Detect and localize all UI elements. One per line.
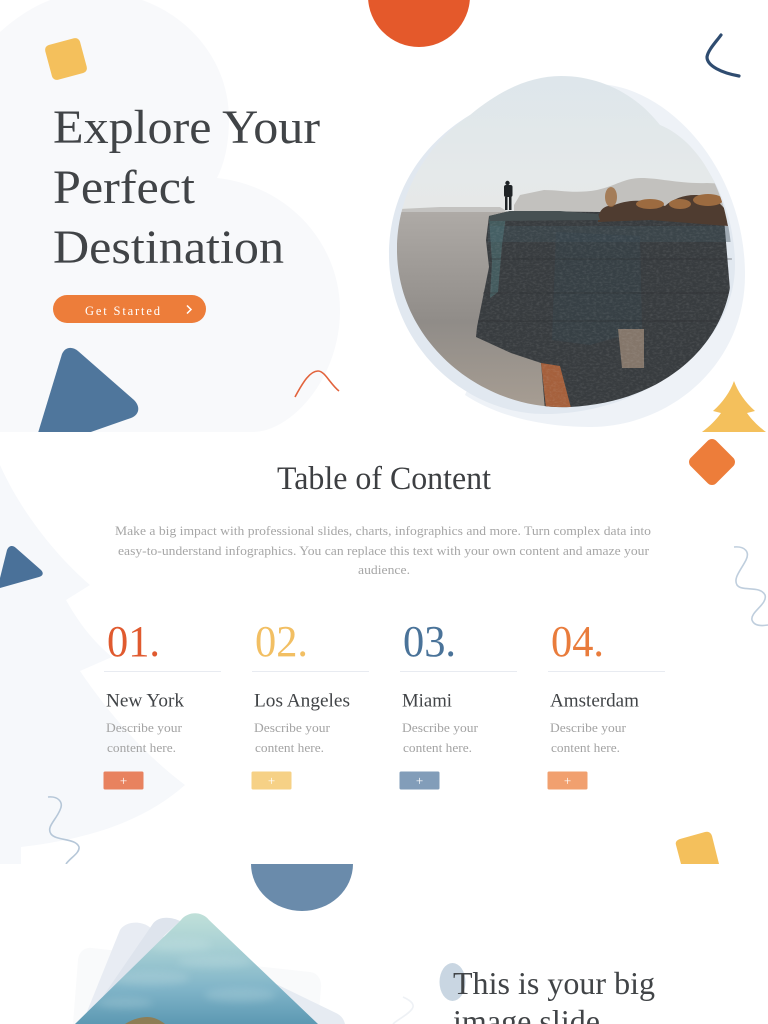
column: Los Angeles: Los Angeles <box>254 690 350 712</box>
panel: hero <box>38 0 766 432</box>
icon: yellow rounded square <box>44 37 88 81</box>
background blob <box>0 0 340 432</box>
photo: clouds above peak <box>75 913 318 1024</box>
column: New York <box>104 617 221 790</box>
icon: blue triangle <box>38 348 138 433</box>
column: Amsterdam <box>548 617 665 790</box>
icon: blue ellipse <box>440 963 466 1001</box>
slide heading: This is your big <box>453 965 655 1001</box>
column: Los Angeles: + <box>268 773 275 788</box>
icon: faint chevron <box>393 997 413 1024</box>
person silhouette <box>504 181 512 210</box>
back shape: tilted triangle left <box>82 923 175 1024</box>
icon: orange circle <box>368 0 470 47</box>
icon: orange diamond <box>687 437 737 487</box>
back blob: pale <box>465 84 745 427</box>
column: Amsterdam: + <box>564 773 571 788</box>
hero title: Perfect <box>53 161 196 214</box>
icon: left squiggle <box>48 797 79 864</box>
button: get started <box>53 295 206 323</box>
column: Los Angeles: Describe your <box>254 720 331 735</box>
back blob: blue <box>389 85 735 414</box>
column: New York: + <box>120 773 127 788</box>
column: Miami: + <box>416 773 423 788</box>
background tree <box>0 465 185 864</box>
intro paragraph: audience. <box>358 562 410 577</box>
column: Miami <box>400 617 517 790</box>
column: Miami: Describe your <box>402 720 479 735</box>
back shape: pale rounded square <box>73 948 321 1024</box>
photo: cliff <box>397 76 732 408</box>
hero title: Explore Your <box>53 101 320 154</box>
column: Los Angeles: content here. <box>255 740 324 755</box>
column: New York: content here. <box>107 740 176 755</box>
column: Miami: Miami <box>402 690 452 712</box>
icon: blue half circle <box>251 864 353 911</box>
hero title <box>53 101 320 274</box>
column: Amsterdam: content here. <box>551 740 620 755</box>
icon: right squiggle <box>734 547 768 625</box>
slide heading <box>453 965 655 1024</box>
hero title: Destination <box>53 221 284 274</box>
column: Amsterdam: Describe your <box>550 720 627 735</box>
column: Amsterdam: Amsterdam <box>550 690 639 712</box>
column: Amsterdam: 04. <box>551 617 604 666</box>
icon: yellow tree <box>702 381 766 432</box>
panel: table of content <box>0 439 768 864</box>
intro paragraph: Make a big impact with professional slides, charts, infographics and more. Turn complex data into <box>115 523 651 538</box>
column: New York: 01. <box>107 617 160 666</box>
back shape: right corner <box>272 982 345 1024</box>
icon: red squiggle <box>295 371 339 397</box>
column: Miami: content here. <box>403 740 472 755</box>
column: Los Angeles <box>252 617 369 790</box>
column: New York: Describe your <box>106 720 183 735</box>
panel: big image slide <box>75 864 655 1024</box>
column: New York: New York <box>106 690 184 712</box>
icon: yellow square <box>676 832 719 864</box>
back shape: tilted triangle middle <box>84 918 180 1024</box>
heading: Table of Content <box>277 461 491 497</box>
column: Miami: 03. <box>403 617 456 666</box>
intro paragraph: easy-to-understand infographics. You can replace this text with your own content and amaze your <box>118 543 650 558</box>
button: get started: Get Started <box>85 304 161 318</box>
icon: navy squiggle <box>707 35 739 76</box>
column: Los Angeles: 02. <box>255 617 308 666</box>
icon: left small triangle <box>0 546 43 588</box>
intro paragraph <box>115 523 651 577</box>
